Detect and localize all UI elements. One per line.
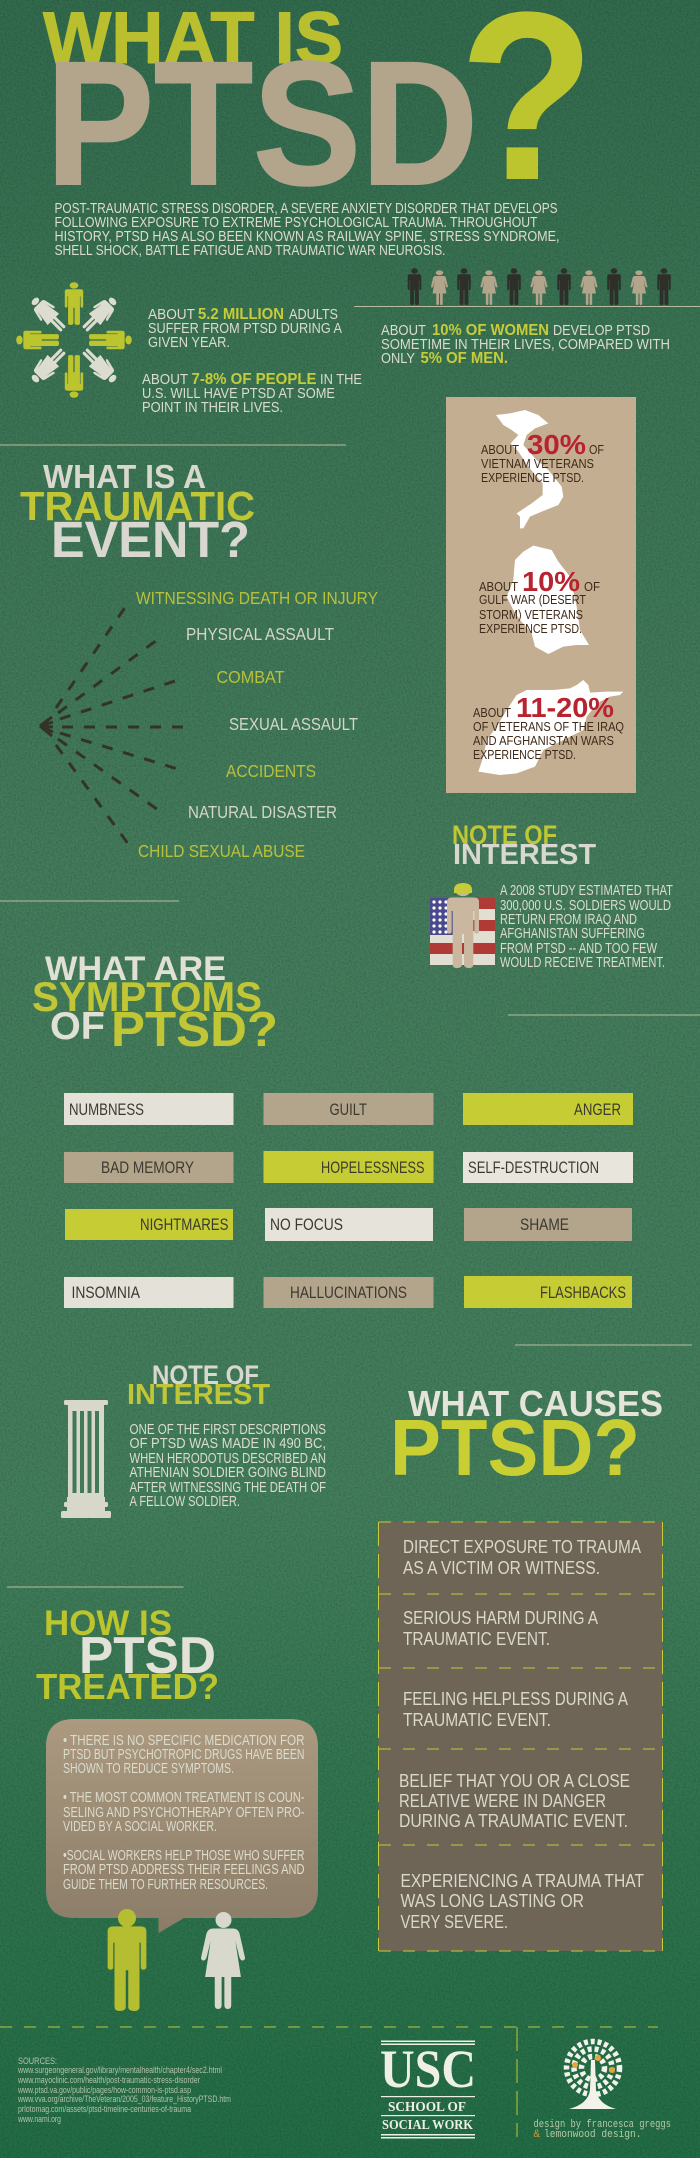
cause: long lasting trauma [400,1871,644,1932]
tag: anger: ANGER [574,1100,621,1119]
map: Iraq [507,546,589,654]
tag: hallucinations: HALLUCINATIONS [290,1283,407,1302]
heading: What are symptoms of PTSD? [32,950,278,1057]
stat: women versus men: ABOUT [381,323,426,339]
stat: 7-8% of people: ABOUT [142,372,188,388]
heading: note of interest: INTEREST [453,839,596,871]
stat: women versus men: 5% OF MEN. [420,350,508,367]
tag: flashbacks: FLASHBACKS [540,1283,626,1302]
title: What is PTSD?: WHAT IS [43,0,343,79]
stat: women versus men [381,322,670,367]
cause: direct exposure [403,1537,641,1578]
heading: What are symptoms of PTSD?: WHAT ARE [45,950,226,988]
list: traumatic events [136,588,378,861]
stat: women versus men: SOMETIME IN THEIR LIVES, COMPARED WITH [381,337,670,353]
cause: long lasting trauma: VERY SEVERE. [400,1912,508,1932]
tag: guilt [264,1093,434,1125]
bullet: medication: SHOWN TO REDUCE SYMPTOMS. [63,1761,234,1777]
panel: causes [378,1522,662,1951]
stat: 5.2 million adults: SUFFER FROM PTSD DURING A [148,321,342,337]
list: traumatic events: PHYSICAL ASSAULT [186,624,334,644]
heading: note of interest: NOTE OF [452,820,557,850]
stat: Vietnam veterans: OF [589,442,604,457]
text: Herodotus note: ONE OF THE FIRST DESCRIPTIONS [130,1422,326,1438]
heading: What is a traumatic event?: TRAUMATIC [20,483,255,529]
heading: How is PTSD treated? [36,1604,219,1707]
sources [17,2056,231,2124]
stat: Iraq and Afghanistan veterans: 11-20% [516,692,614,723]
map: Afghanistan [478,680,623,775]
sources: www.nami.org [17,2114,61,2124]
stat: 5.2 million adults: ADULTS [289,307,338,323]
stat: Iraq and Afghanistan veterans [473,692,624,762]
tag: shame [464,1208,632,1241]
bullet: medication [63,1733,304,1777]
stat: Iraq and Afghanistan veterans: EXPERIENCE PTSD. [473,747,576,762]
tag: anger [463,1093,633,1125]
tag: insomnia [64,1277,234,1308]
text: Herodotus note: WHEN HERODOTUS DESCRIBED AN [130,1451,326,1467]
cause: direct exposure: DIRECT EXPOSURE TO TRAUMA [403,1537,641,1557]
cause: belief of danger [399,1771,630,1831]
sources: www.surgeongeneral.gov/library/mentalhealth/chapter4/sec2.html [17,2065,222,2075]
credit: design by [534,2119,671,2141]
credit: design by: lemonwood design. [544,2129,642,2141]
cause: long lasting trauma: WAS LONG LASTING OR [400,1891,584,1911]
icon: soldier with flag [430,883,495,968]
tag: insomnia: INSOMNIA [72,1283,141,1302]
bullet: medication: PTSD BUT PSYCHOTROPIC DRUGS HAVE BEEN [63,1747,304,1763]
sources: www.mayoclinic.com/health/post-traumatic-stress-disorder [17,2075,200,2085]
heading: What is a traumatic event?: EVENT? [51,511,250,568]
stat: 7-8% of people: IN THE [320,372,362,388]
text: Herodotus note [130,1422,326,1510]
list: traumatic events: CHILD SEXUAL ABUSE [138,841,305,861]
stat: Iraq and Afghanistan veterans: ABOUT [473,705,511,720]
footer dashed divider [0,2027,658,2137]
stat: 5.2 million adults: ABOUT [148,307,195,323]
stat: Vietnam veterans: ABOUT [481,442,519,457]
stat: Gulf War veterans: OF [584,579,600,594]
heading: note of interest 2 [127,1360,270,1411]
stat: women versus men: DEVELOP PTSD [553,323,650,339]
credit: design by: & [534,2129,540,2141]
sources: www.ptsd.va.gov/public/pages/how-common-is-ptsd.asp [17,2085,191,2095]
tag: self-destruction: SELF-DESTRUCTION [468,1158,599,1177]
intro paragraph [54,201,560,259]
stat: Gulf War veterans: 10% [522,566,580,597]
heading: How is PTSD treated?: HOW IS [44,1604,172,1643]
cause: belief of danger: BELIEF THAT YOU OR A CLOSE [399,1771,630,1791]
icon: man [108,1909,146,2011]
bullet: counseling: • THE MOST COMMON TREATMENT IS COUN- [63,1790,305,1806]
bullet: social workers: FROM PTSD ADDRESS THEIR FEELINGS AND [63,1862,304,1878]
stat: Gulf War veterans: ABOUT [479,579,518,594]
speech bubble: treatment [46,1719,318,1933]
cause: serious harm: TRAUMATIC EVENT. [403,1629,550,1649]
list: traumatic events: ACCIDENTS [226,761,316,781]
bullet: counseling: SELING AND PSYCHOTHERAPY OFTEN PRO- [63,1805,305,1821]
panel: veterans statistics [446,397,636,793]
tag: numbness [64,1093,234,1125]
text: Herodotus note: AFTER WITNESSING THE DEATH OF [130,1480,326,1496]
logo: USC School of Social Work [380,2039,476,2138]
bullet: counseling [63,1790,305,1835]
heading: What are symptoms of PTSD?: OF [50,1005,105,1048]
tag: numbness: NUMBNESS [69,1100,144,1119]
text: Herodotus note: OF PTSD WAS MADE IN 490 BC, [130,1436,326,1452]
stat: Gulf War veterans [479,566,600,636]
tag: bad memory [64,1152,234,1183]
stat: women versus men: 10% OF WOMEN [432,322,549,339]
heading: What are symptoms of PTSD?: SYMPTOMS [32,973,262,1020]
stat: Vietnam veterans: 30% [527,429,586,460]
stat: 5.2 million adults: 5.2 MILLION [198,306,284,323]
icon: greek column [61,1400,111,1518]
list: traumatic events: SEXUAL ASSAULT [229,714,358,734]
bullet: social workers: GUIDE THEM TO FURTHER RESOURCES. [63,1877,268,1893]
stat: Gulf War veterans: GULF WAR (DESERT [479,592,586,607]
bullet: counseling: VIDED BY A SOCIAL WORKER. [63,1819,217,1835]
heading: What are symptoms of PTSD?: PTSD? [111,1003,278,1057]
list: traumatic events: NATURAL DISASTER [188,802,337,822]
title: What is PTSD?: PTSD [46,26,478,222]
tag: bad memory: BAD MEMORY [101,1158,194,1177]
row of men and women icons [408,268,671,305]
bullet: medication: • THERE IS NO SPECIFIC MEDICATION FOR [63,1733,304,1749]
tag: hopelessness: HOPELESSNESS [321,1158,424,1177]
stat: women versus men: ONLY [381,351,415,367]
logo: USC School of Social Work: SOCIAL WORK [382,2118,473,2133]
cause: belief of danger: DURING A TRAUMATIC EVENT. [399,1811,628,1831]
tag: hallucinations [264,1277,434,1308]
stat: Iraq and Afghanistan veterans: OF VETERANS OF THE IRAQ [473,719,624,734]
stat: Vietnam veterans [481,429,604,485]
stat: 7-8% of people: POINT IN THEIR LIVES. [142,400,283,416]
tag: flashbacks [464,1276,632,1308]
stat: 5.2 million adults: GIVEN YEAR. [148,335,230,351]
stat: Gulf War veterans: EXPERIENCE PTSD. [479,621,582,636]
stat: Vietnam veterans: VIETNAM VETERANS [481,456,594,471]
cause: feeling helpless: FEELING HELPLESS DURING A [403,1689,628,1709]
heading: note of interest [452,820,596,871]
list: traumatic events: WITNESSING DEATH OR INJURY [136,588,378,608]
tag: nightmares: NIGHTMARES [140,1215,228,1234]
heading: note of interest 2: INTEREST [127,1379,270,1411]
stat: Gulf War veterans: STORM) VETERANS [479,607,583,622]
list: traumatic events: COMBAT [216,667,285,687]
text: 2008 study note: AFGHANISTAN SUFFERING [500,926,645,942]
logo: tree [566,2042,620,2109]
text: 2008 study note: RETURN FROM IRAQ AND [500,912,637,928]
text: Herodotus note: ATHENIAN SOLDIER GOING BLIND [130,1465,326,1481]
sources: www.vva.org/archive/TheVeteran/2005_03/feature_HistoryPTSD.htm [17,2094,231,2104]
stat: 7-8% of people: 7-8% OF PEOPLE [192,371,317,388]
cause: long lasting trauma: EXPERIENCING A TRAUMA THAT [400,1871,644,1891]
cause: serious harm: SERIOUS HARM DURING A [403,1608,598,1628]
heading: What causes PTSD?: PTSD? [390,1403,640,1492]
logo: USC School of Social Work: USC [380,2039,476,2099]
icon: woman [201,1912,245,2009]
intro paragraph: POST-TRAUMATIC STRESS DISORDER, A SEVERE ANXIETY DISORDER THAT DEVELOPS [54,201,558,217]
tag: no focus: NO FOCUS [270,1215,343,1234]
heading: How is PTSD treated?: PTSD [79,1627,216,1685]
tag: nightmares [65,1209,233,1240]
stat: 7-8% of people [142,371,362,416]
cause: serious harm [403,1608,598,1649]
intro paragraph: FOLLOWING EXPOSURE TO EXTREME PSYCHOLOGICAL TRAUMA. THROUGHOUT [54,215,538,231]
heading: What is a traumatic event?: WHAT IS A [43,458,206,495]
logo: USC School of Social Work: SCHOOL OF [388,2100,466,2115]
tag: no focus [265,1208,433,1241]
text: 2008 study note: FROM PTSD -- AND TOO FEW [500,941,657,957]
heading: How is PTSD treated?: TREATED? [36,1666,219,1707]
tag: guilt: GUILT [330,1100,367,1119]
bullet: social workers: •SOCIAL WORKERS HELP THOSE WHO SUFFER [63,1848,304,1864]
text: Herodotus note: A FELLOW SOLDIER. [130,1494,240,1510]
sources: prlotomag.com/assets/ptsd-timeline-centuries-of-trauma [18,2104,191,2114]
intro paragraph: SHELL SHOCK, BATTLE FATIGUE AND TRAUMATIC WAR NEUROSIS. [54,243,446,259]
cause: belief of danger: RELATIVE WERE IN DANGER [399,1791,606,1811]
heading: What causes PTSD?: WHAT CAUSES [408,1383,663,1424]
text: 2008 study note [500,883,673,971]
cause: direct exposure: AS A VICTIM OR WITNESS. [403,1558,600,1578]
tag: hopelessness [264,1151,434,1183]
stat: 7-8% of people: U.S. WILL HAVE PTSD AT SOME [142,386,335,402]
symptom tags [64,1093,633,1308]
heading: What is a traumatic event? [20,458,255,568]
credit: design by: design by francesca greggs [534,2119,671,2131]
stat: Iraq and Afghanistan veterans: AND AFGHANISTAN WARS [473,733,614,748]
cause: feeling helpless: TRAUMATIC EVENT. [403,1710,551,1730]
stat: 5.2 million adults [148,306,342,351]
intro paragraph: HISTORY, PTSD HAS ALSO BEEN KNOWN AS RAILWAY SPINE, STRESS SYNDROME, [54,229,560,245]
icon: ring of eight people [16,282,132,398]
diagram: dashed rays from a point [40,606,190,845]
tag: shame: SHAME [520,1215,569,1234]
map: Vietnam [496,410,563,528]
stat: Vietnam veterans: EXPERIENCE PTSD. [481,470,584,485]
bullet: social workers [63,1848,304,1893]
sources: SOURCES: [18,2056,57,2066]
cause: feeling helpless [403,1689,628,1730]
tag: self-destruction [463,1152,633,1183]
heading: note of interest 2: NOTE OF [152,1360,259,1390]
